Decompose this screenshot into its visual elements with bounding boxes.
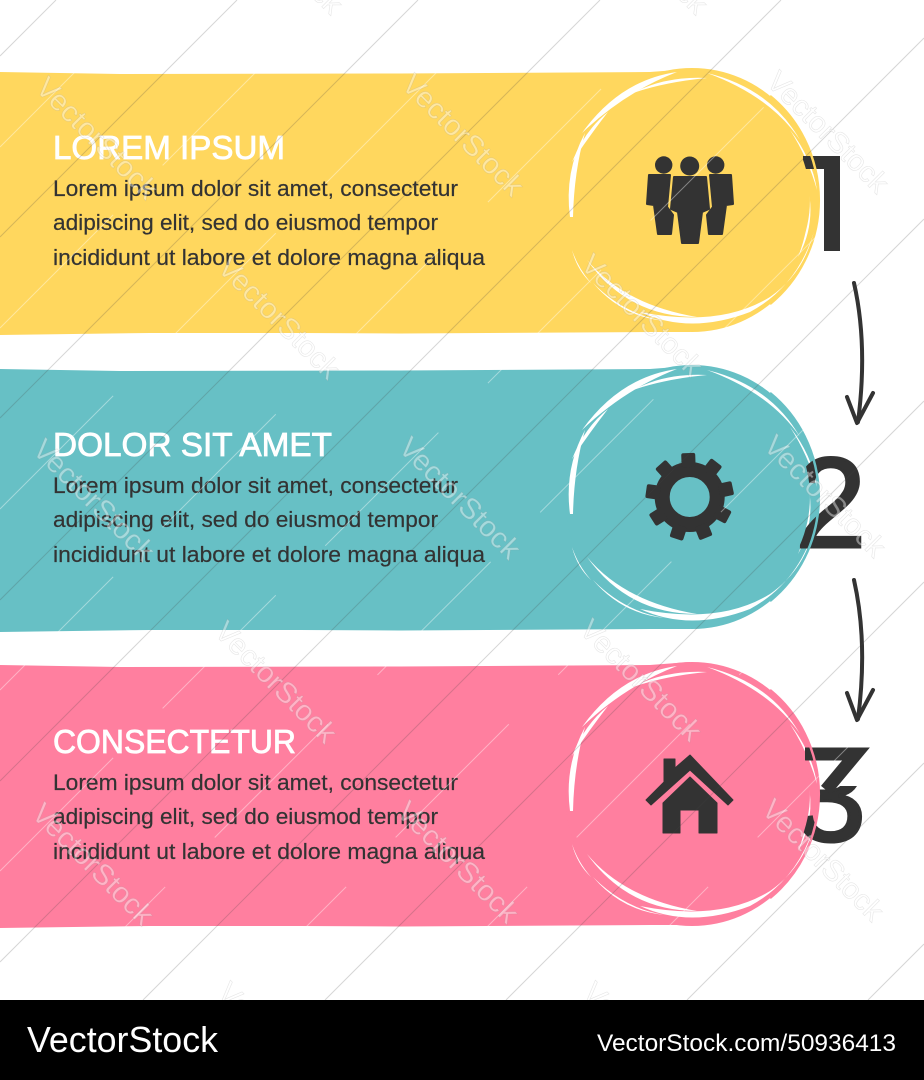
pink band xyxy=(0,662,690,928)
footer bar xyxy=(0,1000,924,1080)
arrow: 1 to 2 xyxy=(847,283,873,423)
watermarks: VectorStock xyxy=(574,248,709,383)
watermarks: VectorStock xyxy=(208,615,343,750)
circle edge: yellow xyxy=(770,96,819,304)
circle edge: pink xyxy=(770,690,819,898)
number 3 xyxy=(804,748,870,844)
circle scribble xyxy=(566,72,817,324)
pink circle xyxy=(565,662,819,926)
number 2: 2 xyxy=(795,432,866,575)
number 3: 3 xyxy=(795,726,866,869)
body text: adipiscing elit, sed do eiusmod tempor xyxy=(53,507,438,532)
body text: Lorem ipsum dolor sit amet, consectetur xyxy=(53,473,458,498)
watermarks: VectorStock xyxy=(395,68,530,203)
body text: adipiscing elit, sed do eiusmod tempor xyxy=(53,210,438,235)
panel: consectetur xyxy=(0,662,819,928)
body text xyxy=(53,473,486,567)
body text xyxy=(53,176,486,270)
watermarks: VectorStock xyxy=(760,65,895,200)
circle scribble xyxy=(566,369,817,620)
watermarks: VectorStock xyxy=(757,429,892,564)
body text: incididunt ut labore et dolore magna aliqua xyxy=(53,542,486,567)
icon: gear xyxy=(645,453,734,541)
heading: DOLOR SIT AMET xyxy=(53,426,332,463)
footer logo: VectorStock xyxy=(27,1019,219,1060)
yellow band xyxy=(0,69,690,335)
icon: house xyxy=(646,755,733,833)
body text: Lorem ipsum dolor sit amet, consectetur xyxy=(53,176,458,201)
body text: adipiscing elit, sed do eiusmod tempor xyxy=(53,804,438,829)
panel: lorem ipsum xyxy=(0,68,819,335)
arrow: 2 to 3 xyxy=(847,580,873,720)
watermarks: VectorStock xyxy=(211,251,346,386)
panel: dolor sit amet xyxy=(0,365,819,632)
body text: Lorem ipsum dolor sit amet, consectetur xyxy=(53,770,458,795)
teal band xyxy=(0,366,690,632)
watermarks: VectorStock xyxy=(25,797,160,932)
watermarks: VectorStock xyxy=(26,433,161,568)
circle edge: teal xyxy=(770,393,819,601)
body text: incididunt ut labore et dolore magna aliqua xyxy=(53,839,486,864)
watermarks: VectorStock xyxy=(392,431,527,566)
yellow circle xyxy=(565,68,819,332)
number 1 xyxy=(803,156,840,251)
footer image id: VectorStock.com/50936413 xyxy=(597,1030,896,1057)
icon: people xyxy=(647,156,733,243)
circle scribble xyxy=(566,666,817,918)
watermarks: VectorStock xyxy=(573,613,708,748)
heading: LOREM IPSUM xyxy=(53,129,285,166)
watermarks: VectorStock xyxy=(29,71,164,206)
heading: CONSECTETUR xyxy=(53,723,296,760)
number 1: 1 xyxy=(791,128,867,281)
teal circle xyxy=(565,365,819,629)
watermarks: VectorStock xyxy=(755,793,890,928)
body text xyxy=(53,770,486,864)
body text: incididunt ut labore et dolore magna aliqua xyxy=(53,245,486,270)
watermarks: VectorStock xyxy=(390,795,525,930)
